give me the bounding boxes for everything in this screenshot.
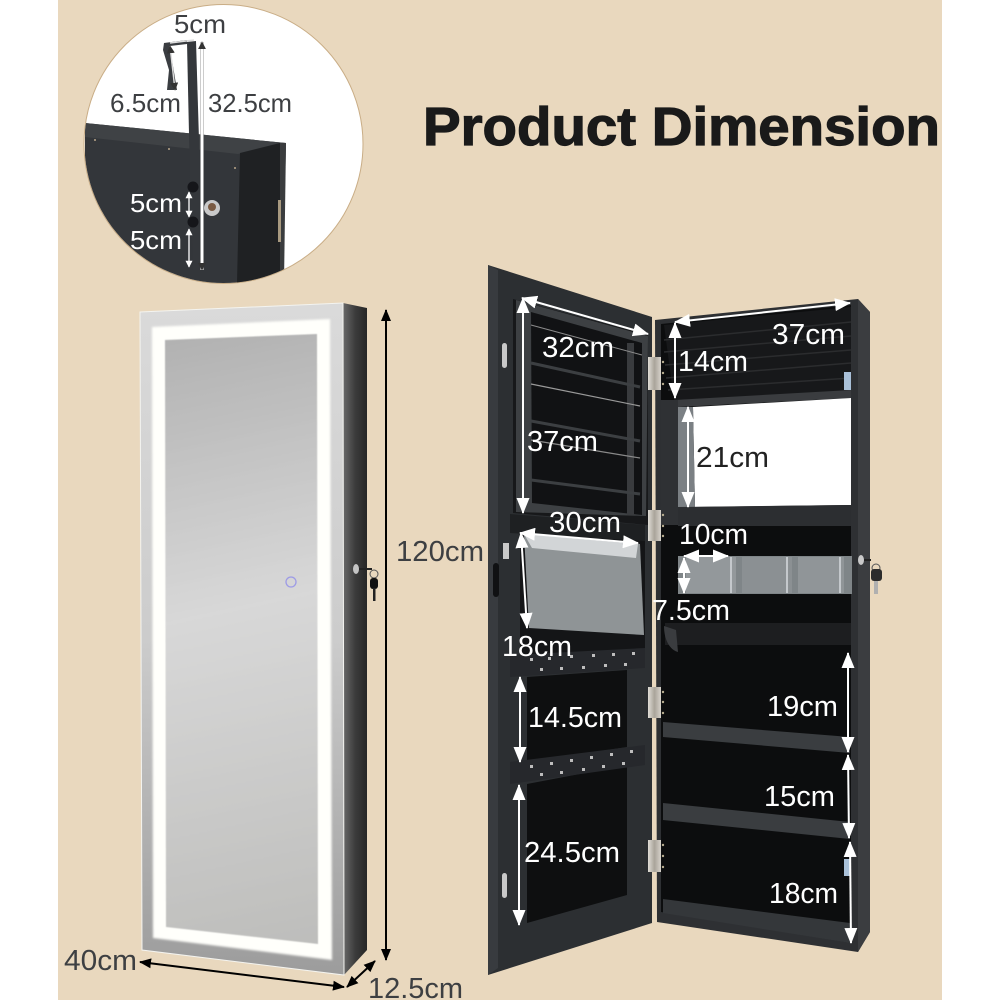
hinge column xyxy=(661,400,678,525)
lock and key xyxy=(353,564,378,601)
door recess xyxy=(513,299,648,525)
divider bar xyxy=(510,514,645,541)
hanger labels: 5cm xyxy=(130,225,182,255)
earring bar lower xyxy=(510,745,645,784)
dimension arrows: white xyxy=(519,298,851,943)
dimension labels: interior: 21cm xyxy=(696,442,769,474)
jewelry frame xyxy=(516,300,648,516)
dimension labels: interior: 14cm xyxy=(678,346,748,378)
hinge screws xyxy=(662,361,664,868)
earring holes xyxy=(530,652,635,776)
dimension labels: interior: 15cm xyxy=(764,781,835,813)
lower black panel xyxy=(527,670,627,762)
LED light band xyxy=(152,319,332,960)
middle bar xyxy=(678,505,851,526)
hanger labels xyxy=(110,9,292,255)
dimension labels: interior: 10cm xyxy=(679,519,748,551)
dimension labels: interior: 19cm xyxy=(767,691,838,723)
panel: open cabinet body xyxy=(655,299,882,952)
necklace rods xyxy=(531,325,642,494)
necklace panel backing xyxy=(531,312,642,515)
mirror window xyxy=(693,398,851,507)
panel: closed mirror front xyxy=(140,303,378,975)
dimension labels: interior: 37cm xyxy=(772,319,845,351)
touch switch icon xyxy=(286,577,296,587)
dimension labels: interior: 18cm xyxy=(769,878,838,910)
cabinet outer xyxy=(655,299,870,952)
label: 120cm: 120cm xyxy=(396,536,484,568)
shelves xyxy=(663,722,850,753)
arrow: depth 12.5cm xyxy=(347,961,375,987)
lock and key xyxy=(858,555,882,594)
title: Product Dimension xyxy=(423,97,940,157)
door frame xyxy=(488,265,652,975)
hanger labels: 6.5cm xyxy=(110,88,181,118)
acrylic organizers xyxy=(678,556,852,594)
mirror side panel xyxy=(343,303,367,975)
ring tray xyxy=(664,307,851,400)
hanger labels: 32.5cm xyxy=(208,88,292,118)
cosmetic pouch xyxy=(524,534,644,635)
hanger labels: 5cm xyxy=(174,9,226,39)
dimension labels: interior: 30cm xyxy=(549,507,621,539)
dimension labels: interior: 24.5cm xyxy=(524,837,620,869)
hanger labels: 5cm xyxy=(130,188,182,218)
arrow: width 40cm xyxy=(140,962,344,987)
hinges xyxy=(648,357,661,872)
panel: hanger hook detail circle xyxy=(84,4,363,284)
cabinet back photo xyxy=(85,123,286,283)
magnets and latch xyxy=(493,343,509,898)
panel: open door interior xyxy=(488,265,652,975)
clip right xyxy=(844,372,851,390)
dimension labels: interior: 14.5cm xyxy=(528,702,622,734)
dimension labels: interior: 37cm xyxy=(527,426,598,458)
dimension labels: interior: 7.5cm xyxy=(652,595,730,627)
mirror frame xyxy=(140,303,344,975)
cabinet interior xyxy=(661,305,851,943)
mirror glass xyxy=(165,334,318,944)
hanger hook xyxy=(163,40,199,270)
roller tray xyxy=(665,623,851,645)
dimension labels: interior xyxy=(502,319,845,910)
arrows on hanger xyxy=(170,40,202,270)
arrow: height 120cm xyxy=(385,310,387,960)
dimension labels: interior: 18cm xyxy=(502,631,572,663)
dimension labels: interior: 32cm xyxy=(542,332,614,364)
label: 40cm: 40cm xyxy=(64,945,137,977)
door gap line xyxy=(652,318,654,923)
earring bar upper xyxy=(510,648,645,677)
